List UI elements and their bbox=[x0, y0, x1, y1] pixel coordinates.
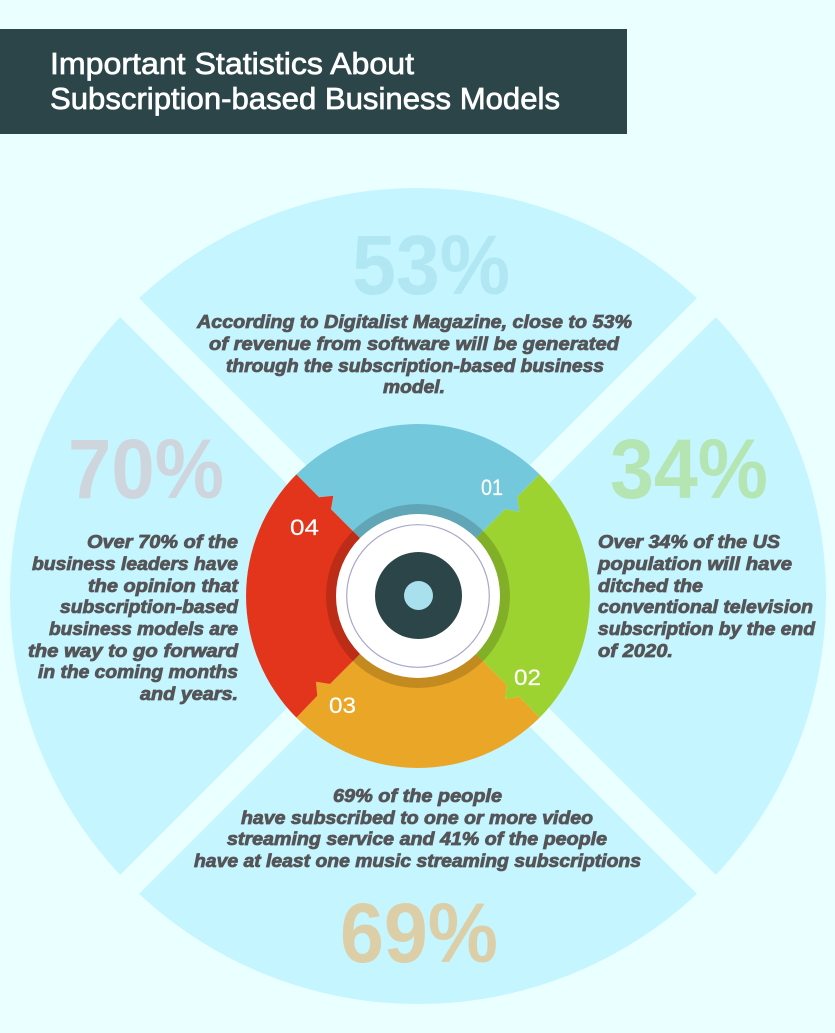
title bbox=[50, 46, 560, 116]
text: business leaders statistic: and years. bbox=[140, 684, 238, 704]
inner shadow ring bbox=[326, 504, 510, 688]
title banner bbox=[0, 29, 627, 134]
text: television statistic: conventional television bbox=[598, 597, 813, 617]
text: television statistic: subscription by the end bbox=[598, 619, 816, 639]
hub outline ring bbox=[347, 525, 489, 667]
text: business leaders statistic: Over 70% of the bbox=[87, 532, 238, 552]
label 02: 02 bbox=[514, 665, 541, 690]
text: streaming statistic: 69% of the people bbox=[333, 786, 502, 806]
label 04: 04 bbox=[290, 515, 319, 540]
text: Digitalist Magazine statistic bbox=[196, 312, 632, 397]
title: Important Statistics About bbox=[50, 46, 414, 81]
text: business leaders statistic bbox=[28, 532, 239, 704]
label 01: 01 bbox=[481, 475, 503, 500]
dark hub disc bbox=[375, 552, 462, 639]
text: Digitalist Magazine statistic: According to Digitalist Magazine, close to 53% bbox=[196, 312, 632, 332]
big number 53%: 53% bbox=[352, 218, 510, 312]
text: business leaders statistic: the way to go forward bbox=[28, 641, 239, 661]
text: television statistic: population will have bbox=[597, 554, 792, 574]
panel: top petal 53% bbox=[139, 188, 697, 577]
big number 70%: 70% bbox=[68, 422, 224, 516]
segment 03 orange bbox=[296, 596, 540, 768]
text: streaming statistic bbox=[194, 786, 641, 871]
white hub bbox=[336, 514, 500, 678]
panel: left petal 70% bbox=[10, 317, 399, 875]
text: streaming statistic: have at least one music streaming subscriptions bbox=[194, 851, 641, 871]
text: streaming statistic: streaming service and 41% of the people bbox=[227, 829, 607, 849]
segment 04 red bbox=[246, 474, 418, 718]
text: business leaders statistic: business leaders have bbox=[32, 554, 238, 574]
text: business leaders statistic: the opinion that bbox=[88, 576, 239, 596]
panel: right petal 34% bbox=[437, 317, 826, 875]
segment 01 blue bbox=[296, 424, 540, 596]
big number 69%: 69% bbox=[340, 886, 498, 980]
text: television statistic: Over 34% of the US bbox=[598, 532, 780, 552]
text: television statistic: of 2020. bbox=[598, 641, 673, 661]
text: streaming statistic: have subscribed to one or more video bbox=[241, 808, 593, 828]
segment 02 green bbox=[418, 474, 590, 718]
title: Subscription-based Business Models bbox=[50, 81, 560, 116]
panel: bottom petal 69% bbox=[139, 615, 697, 1004]
text: television statistic bbox=[597, 532, 816, 661]
text: business leaders statistic: business models are bbox=[49, 619, 238, 639]
text: business leaders statistic: subscription-based bbox=[60, 597, 239, 617]
central ring diagram bbox=[246, 424, 590, 768]
label 03: 03 bbox=[329, 693, 356, 718]
text: Digitalist Magazine statistic: through the subscription-based business bbox=[226, 356, 604, 376]
light hub dot bbox=[404, 581, 433, 610]
text: television statistic: ditched the bbox=[598, 576, 703, 596]
text: Digitalist Magazine statistic: model. bbox=[383, 377, 445, 397]
text: business leaders statistic: in the coming months bbox=[38, 662, 238, 682]
text: Digitalist Magazine statistic: of revenue from software will be generated bbox=[209, 334, 620, 354]
big number 34%: 34% bbox=[610, 422, 768, 516]
